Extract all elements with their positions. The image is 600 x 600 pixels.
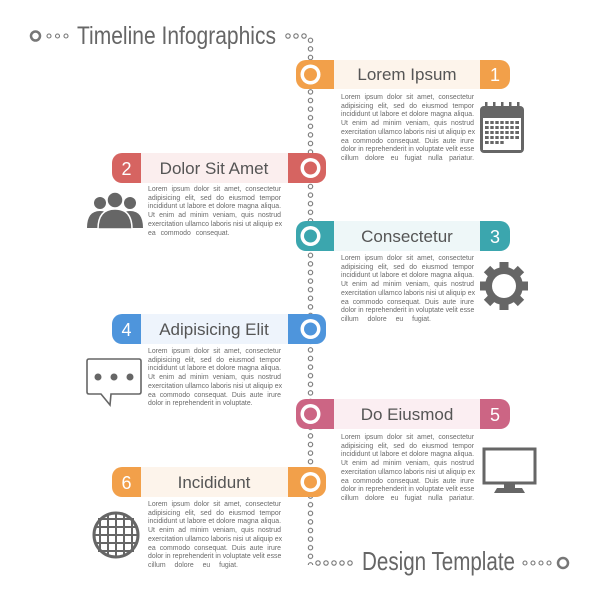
bar 4: Adipisicing Elit [112, 314, 326, 344]
text block 1: cillum dolore eu fugiat nulla pariatur. [341, 155, 474, 162]
text block 4: exercitation ullamco laboris nisi ut aliquip ex [148, 383, 282, 390]
text block 4: dolor in reprehenderit in voluptate. [148, 400, 253, 407]
bar 4: Adipisicing Elit: Adipisicing Elit [159, 320, 269, 339]
text block 1: ea commodo consequat. Duis aute irure [341, 138, 474, 145]
text block 5: Ut enim ad minim veniam, quis nostrud [341, 460, 474, 467]
text block 4: adipisicing elit, sed do eiusmod tempor [148, 357, 281, 364]
icon: chat bubble [87, 359, 141, 405]
bar 5: Do Eiusmod [296, 399, 510, 429]
text block 2 [148, 186, 282, 237]
text block 4: Ut enim ad minim veniam, quis nostrud [148, 374, 281, 381]
text block 4: incididunt ut labore et dolore magna aliqua. [148, 365, 281, 372]
text block 3: exercitation ullamco laboris nisi ut aliquip ex [341, 290, 475, 297]
bar 5: Do Eiusmod: 5 [490, 405, 500, 425]
bar 2: Dolor Sit Amet [112, 153, 326, 183]
bar 1: Lorem Ipsum: Lorem Ipsum [357, 65, 457, 84]
text block 5 [341, 434, 475, 502]
text block 6: Ut enim ad minim veniam, quis nostrud [148, 527, 281, 534]
text block 3: adipisicing elit, sed do eiusmod tempor [341, 264, 474, 271]
text block 6: cillum dolore eu fugiat. [148, 562, 238, 569]
text block 1: exercitation ullamco laboris nisi ut aliquip ex [341, 129, 475, 136]
text block 6: Lorem ipsum dolor sit amet, consectetur [148, 501, 281, 508]
text block 5: incididunt ut labore et dolore magna aliqua. [341, 451, 474, 458]
bar 1: Lorem Ipsum [296, 60, 510, 89]
icon: monitor [484, 449, 535, 493]
text block 4: ea commodo consequat. Duis aute irure [148, 392, 281, 399]
text block 5: exercitation ullamco laboris nisi ut aliquip ex [341, 469, 475, 476]
bar 5: Do Eiusmod: Do Eiusmod [361, 405, 453, 424]
text block 5: ea commodo consequat. Duis aute irure [341, 478, 474, 485]
text block 2: exercitation ullamco laboris nisi ut aliquip ex [148, 221, 282, 228]
text block 2: Lorem ipsum dolor sit amet, consectetur [148, 186, 281, 193]
text block 1 [341, 94, 475, 162]
text block 1: adipisicing elit, sed do eiusmod tempor [341, 103, 474, 110]
text block 1: Lorem ipsum dolor sit amet, consectetur [341, 94, 474, 101]
text block 3: incididunt ut labore et dolore magna aliqua. [341, 272, 474, 279]
text block 6: exercitation ullamco laboris nisi ut aliquip ex [148, 536, 282, 543]
text block 5: Lorem ipsum dolor sit amet, consectetur [341, 434, 474, 441]
bar 3: Consectetur [296, 221, 510, 251]
text block 3: Ut enim ad minim veniam, quis nostrud [341, 281, 474, 288]
icon: globe [94, 513, 138, 557]
bar 3: Consectetur: Consectetur [361, 227, 453, 246]
text block 5: adipisicing elit, sed do eiusmod tempor [341, 443, 474, 450]
icon: people [87, 192, 143, 229]
text block 6: adipisicing elit, sed do eiusmod tempor [148, 510, 281, 517]
text block 2: ea commodo consequat. [148, 230, 229, 237]
text block 2: incididunt ut labore et dolore magna aliqua. [148, 203, 281, 210]
bar 6: Incididunt: 6 [121, 473, 132, 493]
text block 6: ea commodo consequat. Duis aute irure [148, 545, 281, 552]
text block 6: incididunt ut labore et dolore magna aliqua. [148, 518, 281, 525]
text block 1: Ut enim ad minim veniam, quis nostrud [341, 120, 474, 127]
text block 4 [148, 348, 282, 407]
bar 2: Dolor Sit Amet: Dolor Sit Amet [160, 159, 269, 178]
icon: calendar [480, 102, 524, 153]
text block 3 [341, 254, 475, 323]
text block 2: adipisicing elit, sed do eiusmod tempor [148, 195, 281, 202]
footer title: Design Template [362, 546, 515, 576]
text block 2: Ut enim ad minim veniam, quis nostrud [148, 212, 281, 219]
bar 2: Dolor Sit Amet: 2 [121, 159, 132, 179]
icon: gear [480, 262, 528, 310]
text block 3: ea commodo consequat. Duis aute irure [341, 299, 474, 306]
bar 6: Incididunt [112, 467, 326, 497]
text block 5: cillum dolore eu fugiat nulla pariatur. [341, 495, 474, 502]
text block 6: dolor in reprehenderit in voluptate velit esse [148, 553, 281, 560]
text block 6 [148, 500, 282, 569]
text block 3: Lorem ipsum dolor sit amet, consectetur [341, 255, 474, 262]
bar 6: Incididunt: Incididunt [178, 473, 251, 492]
text block 1: incididunt ut labore et dolore magna aliqua. [341, 111, 474, 118]
text block 3: dolor in reprehenderit in voluptate velit esse [341, 307, 474, 314]
text block 4: Lorem ipsum dolor sit amet, consectetur [148, 348, 281, 355]
title: Timeline Infographics [77, 22, 276, 50]
bar 3: Consectetur: 3 [490, 227, 500, 247]
bar 1: Lorem Ipsum: 1 [490, 65, 500, 85]
text block 3: cillum dolore eu fugiat. [341, 316, 431, 323]
bar 4: Adipisicing Elit: 4 [121, 320, 132, 340]
text block 5: dolor in reprehenderit in voluptate velit esse [341, 486, 474, 493]
text block 1: dolor in reprehenderit in voluptate velit esse [341, 146, 474, 153]
timeline dotted line [284, 31, 354, 568]
